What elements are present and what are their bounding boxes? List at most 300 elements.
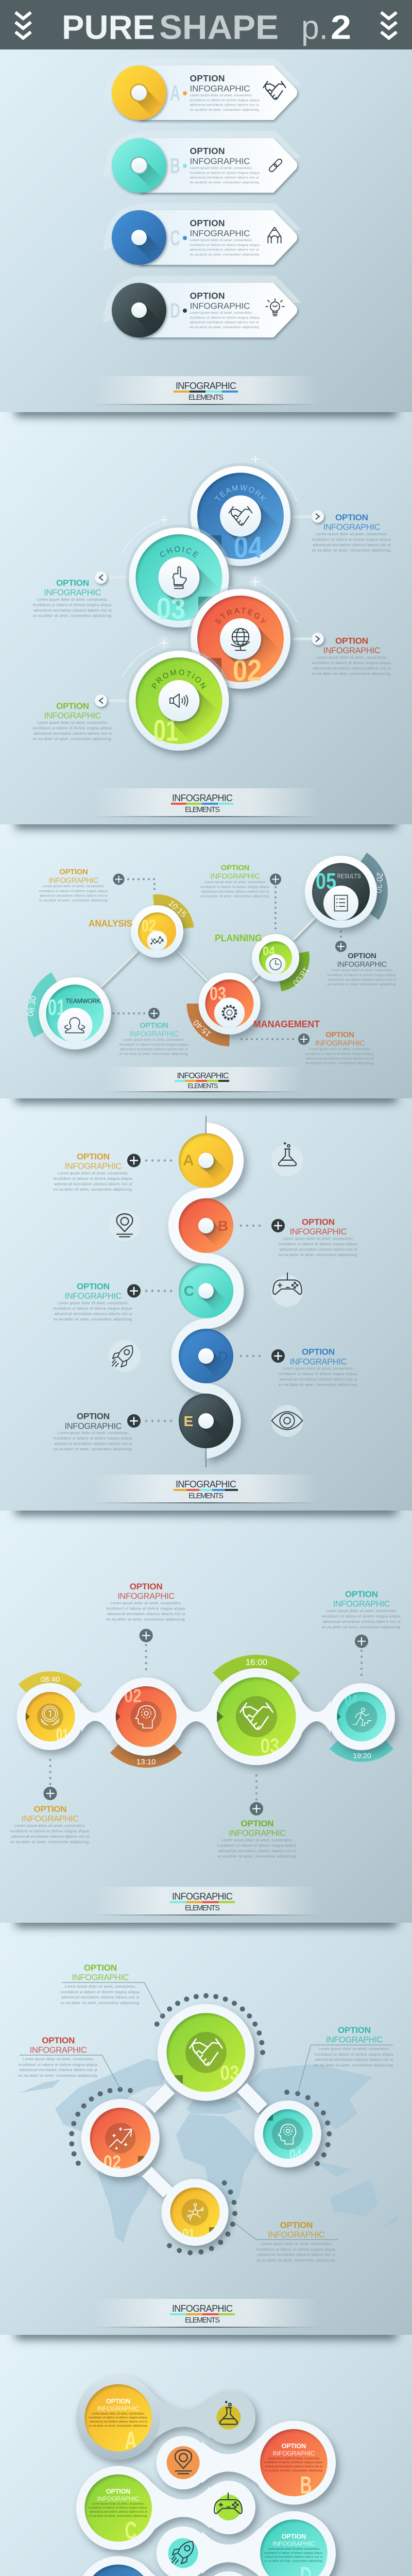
- time bands: [22, 1662, 389, 1761]
- disc E: [179, 1394, 233, 1448]
- text block A: adnostrud xercitation ullamco laboris nisi ut: [55, 1183, 132, 1186]
- text block 01: ex ea.dolor sit amet, consectetur adipisicing.: [10, 1840, 90, 1844]
- tag D: OPTION: [190, 291, 225, 301]
- text block green: ex ea.dolor sit amet, consectetur adipisicing.: [61, 2002, 140, 2005]
- capsule C: OPTION: [106, 2488, 130, 2495]
- text block: promotion option: adnostrud xercitation ullamco laboris nisi ut: [34, 732, 112, 736]
- text block E: INFOGRAPHIC: [65, 1421, 122, 1431]
- text block teal: ex ea.dolor sit amet, consectetur adipisicing.: [315, 2064, 394, 2067]
- text block: management option: adnostrud xercitation ullamco laboris nisi ut: [306, 1057, 374, 1061]
- band times: [41, 1657, 371, 1766]
- tag D: ex ea.dolor sit amet, consectetur adipisicing.: [190, 326, 260, 329]
- ring 02 strategy: STRATEGY: [215, 608, 267, 624]
- circle 04 teal: 04: [289, 2146, 302, 2162]
- capsule A: ex ea.dolor sit amet, consectetur adipisicing.: [89, 2425, 148, 2428]
- text block yellow: Lorem ipsum dolor sit amet, consectetur,: [261, 2242, 332, 2246]
- text block: planning option: adnostrud xercitation ullamco laboris nisi ut: [201, 890, 269, 894]
- text block 01: incididunt ut labore et dolore magna aliqua.: [10, 1830, 90, 1833]
- header title: 2: [331, 8, 351, 46]
- text block: results option: incididunt ut labore et dolore magna aliqua.: [328, 973, 397, 977]
- text block B: Lorem ipsum dolor sit amet, consectetur,: [283, 1238, 354, 1241]
- tag B: adnostrud xercitation ullamco laboris nisi ut: [190, 176, 259, 179]
- text block: choice option: incididunt ut labore et dolore magna aliqua.: [33, 604, 113, 607]
- dotted leaders and plus markers: [113, 874, 347, 1045]
- footer label: [93, 2299, 319, 2328]
- text block A: INFOGRAPHIC: [65, 1162, 122, 1171]
- tag C: C: [170, 226, 180, 250]
- text block green: OPTION: [84, 1963, 117, 1973]
- text block yellow: ex ea.dolor sit amet, consectetur adipisicing.: [256, 2259, 336, 2263]
- capsule A: OPTION: [106, 2398, 130, 2405]
- text block: teamwork option: ex ea.dolor sit amet, consectetur adipisicing.: [312, 549, 391, 552]
- top shadow: [15, 818, 397, 828]
- text block 01: OPTION: [34, 1804, 67, 1814]
- capsule D: Lorem ipsum dolor sit amet, consectetur,: [267, 2548, 320, 2551]
- text block green: adnostrud xercitation ullamco laboris nisi ut: [62, 1996, 140, 1999]
- dotted leaders: [146, 1160, 266, 1421]
- capsule C: C: [125, 2517, 137, 2545]
- top shadow: [15, 2329, 397, 2339]
- footer label: ELEMENTS: [187, 1082, 218, 1090]
- text block: results option: adnostrud xercitation ullamco laboris nisi ut: [328, 978, 396, 982]
- top shadow: [15, 1092, 397, 1103]
- capsule C: Lorem ipsum dolor sit amet, consectetur,: [92, 2502, 145, 2505]
- text block: teamwork option: OPTION: [335, 513, 368, 522]
- node 02 analysis: [131, 899, 188, 958]
- world map: [20, 2059, 400, 2243]
- text block: management option: INFOGRAPHIC: [315, 1039, 365, 1047]
- tag B: incididunt ut labore et dolore magna aliqua.: [190, 171, 261, 175]
- text block: analysis option: adnostrud xercitation ullamco laboris nisi ut: [40, 894, 108, 898]
- capsule B: [157, 2420, 336, 2505]
- tag B: INFOGRAPHIC: [190, 157, 250, 166]
- node 05 results: [305, 856, 384, 928]
- disc A: A: [183, 1152, 194, 1169]
- tag D: D: [170, 298, 180, 323]
- tag D: Lorem ipsum dolor sit amet, consectetur,: [190, 311, 253, 315]
- tag D: incididunt ut labore et dolore magna aliqua.: [190, 316, 261, 319]
- capsule B: ex ea.dolor sit amet, consectetur adipisicing.: [264, 2469, 323, 2472]
- text block teal: [314, 2025, 394, 2067]
- circle 01 yellow: [170, 2188, 220, 2241]
- disc E: E: [184, 1413, 193, 1429]
- circle 03 green: 03: [220, 2062, 239, 2084]
- text block B: INFOGRAPHIC: [289, 1227, 347, 1236]
- knob chevrons: [99, 514, 319, 704]
- footer label: ELEMENTS: [188, 1492, 224, 1500]
- band times: 13:10: [136, 1758, 156, 1766]
- panel 3: timeline network: [0, 818, 412, 1098]
- ring 04 teamwork: 04: [234, 531, 263, 564]
- text block: teamwork option: adnostrud xercitation ullamco laboris nisi ut: [313, 544, 391, 547]
- icon: right chevrons: [381, 12, 397, 38]
- text block 01: Lorem ipsum dolor sit amet, consectetur,: [14, 1824, 86, 1828]
- circle 04: 04: [345, 1692, 358, 1709]
- footer label: [93, 1475, 319, 1503]
- text block: strategy option: OPTION: [335, 636, 368, 646]
- panel background: [0, 1511, 412, 1923]
- capsule C: incididunt ut labore et dolore magna aliqua.: [89, 2506, 148, 2510]
- text block yellow: OPTION: [280, 2221, 313, 2230]
- text block A: OPTION: [77, 1152, 110, 1161]
- panel background: [0, 412, 412, 824]
- tag A: INFOGRAPHIC: [190, 83, 250, 94]
- text block: choice option: INFOGRAPHIC: [44, 588, 101, 598]
- capsule E: [76, 2556, 255, 2576]
- disc C: C: [184, 1283, 194, 1299]
- header title: p.: [301, 8, 328, 46]
- text block D: adnostrud xercitation ullamco laboris nisi ut: [279, 1378, 357, 1382]
- circle 04: [337, 1692, 386, 1741]
- disc B: B: [218, 1218, 228, 1234]
- text block: promotion option: [33, 701, 113, 741]
- ring 04 teamwork: [187, 463, 298, 575]
- text block: teamwork option: INFOGRAPHIC: [129, 1030, 179, 1038]
- text block green: incididunt ut labore et dolore magna aliqua.: [61, 1991, 141, 1994]
- capsule B: Lorem ipsum dolor sit amet, consectetur,: [267, 2457, 320, 2460]
- text block: teamwork option: [119, 1022, 189, 1056]
- stage labels: MANAGEMENT: [253, 1019, 320, 1029]
- text block: analysis option: Lorem ipsum dolor sit amet, consectetur,: [43, 885, 105, 888]
- node 02 analysis: 02: [142, 917, 156, 935]
- tag C: Lorem ipsum dolor sit amet, consectetur,: [190, 239, 253, 242]
- tag A: A: [170, 81, 180, 105]
- text block green: [61, 1963, 141, 2005]
- disc B: [179, 1198, 233, 1253]
- tag D: [103, 276, 301, 337]
- text block: strategy option: ex ea.dolor sit amet, consectetur adipisicing.: [312, 672, 391, 676]
- tag A: incididunt ut labore et dolore magna aliqua.: [190, 99, 261, 102]
- disc A: [179, 1133, 233, 1188]
- text block: strategy option: INFOGRAPHIC: [323, 646, 381, 655]
- text block: promotion option: incididunt ut labore et dolore magna aliqua.: [33, 726, 113, 731]
- icon badges: [109, 1143, 303, 1437]
- text block red: [19, 2036, 98, 2078]
- footer label: [105, 1067, 302, 1092]
- text block yellow: [256, 2221, 336, 2263]
- node 04 planning: [252, 934, 311, 987]
- text block 02: INFOGRAPHIC: [117, 1592, 175, 1601]
- capsule A: [76, 2376, 255, 2460]
- header bar: [0, 0, 412, 49]
- node 05 results: RESULTS: [337, 873, 361, 880]
- capsule D: ex ea.dolor sit amet, consectetur adipisicing.: [264, 2560, 323, 2563]
- ring 03 choice: CHOICE: [160, 546, 199, 558]
- ring 02 strategy: 02: [233, 654, 262, 687]
- text block: teamwork option: ex ea.dolor sit amet, consectetur adipisicing.: [119, 1053, 188, 1056]
- arrow knobs: [95, 510, 324, 707]
- footer label: [93, 376, 319, 405]
- disc C: [179, 1264, 233, 1318]
- text block 04: OPTION: [345, 1589, 378, 1599]
- capsule C: [76, 2466, 255, 2550]
- text block: results option: Lorem ipsum dolor sit amet, consectetur,: [331, 969, 393, 972]
- text block 01: INFOGRAPHIC: [22, 1815, 79, 1824]
- text block teal: incididunt ut labore et dolore magna aliqua.: [314, 2053, 394, 2057]
- stage labels: PLANNING: [215, 933, 262, 943]
- panel background: [0, 2335, 412, 2576]
- circle 02: 02: [124, 1685, 142, 1706]
- text block D: OPTION: [302, 1347, 335, 1357]
- footer label: INFOGRAPHIC: [172, 2303, 233, 2314]
- text block teal: Lorem ipsum dolor sit amet, consectetur,: [319, 2047, 390, 2051]
- tag B: ex ea.dolor sit amet, consectetur adipisicing.: [190, 181, 260, 184]
- text block 01: [10, 1804, 90, 1844]
- node 01 teamwork: 01: [48, 995, 65, 1020]
- text block D: incididunt ut labore et dolore magna aliqua.: [278, 1372, 358, 1376]
- disc D: D: [218, 1348, 228, 1364]
- text block: management option: OPTION: [325, 1031, 354, 1039]
- footer label: INFOGRAPHIC: [177, 1072, 229, 1080]
- connected white rings: [81, 2004, 321, 2246]
- text block C: INFOGRAPHIC: [65, 1292, 122, 1301]
- ring 02 strategy: [187, 586, 298, 697]
- text block 03: incididunt ut labore et dolore magna aliqua.: [217, 1844, 297, 1848]
- tag A: ex ea.dolor sit amet, consectetur adipisicing.: [190, 108, 260, 112]
- text block: teamwork option: adnostrud xercitation ullamco laboris nisi ut: [120, 1047, 188, 1052]
- node 04 planning: 04: [263, 944, 276, 958]
- node 01 teamwork: TEAMWORK: [66, 997, 101, 1005]
- tag C: INFOGRAPHIC: [190, 229, 250, 238]
- text block: analysis option: OPTION: [59, 868, 88, 876]
- ring 01 promotion: [126, 648, 236, 759]
- panel 4: serpentine vertical timeline: [0, 1092, 412, 1511]
- text block E: adnostrud xercitation ullamco laboris nisi ut: [55, 1443, 132, 1446]
- text block: planning option: INFOGRAPHIC: [210, 872, 260, 880]
- ring 01 promotion: PROMOTION: [151, 670, 207, 689]
- text block green: Lorem ipsum dolor sit amet, consectetur,: [65, 1985, 136, 1989]
- text block B: incididunt ut labore et dolore magna aliqua.: [278, 1243, 358, 1246]
- tag D: adnostrud xercitation ullamco laboris nisi ut: [190, 320, 259, 325]
- text block A: incididunt ut labore et dolore magna aliqua.: [54, 1177, 133, 1181]
- circle 03 green: [167, 2013, 245, 2092]
- tag A: Lorem ipsum dolor sit amet, consectetur,: [190, 94, 253, 97]
- node 01 teamwork: 08:30: [26, 995, 38, 1017]
- text block D: INFOGRAPHIC: [289, 1357, 347, 1366]
- connector links: [101, 918, 315, 987]
- top shadow: [15, 1504, 397, 1515]
- text block: teamwork option: incididunt ut labore et dolore magna aliqua.: [119, 1043, 189, 1046]
- band times: 19:20: [353, 1752, 371, 1760]
- linked white rings: [16, 1668, 395, 1765]
- header title: PURE: [62, 8, 155, 46]
- text block C: Lorem ipsum dolor sit amet, consectetur,: [58, 1301, 129, 1306]
- plus markers: [127, 1154, 285, 1428]
- text block red: adnostrud xercitation ullamco laboris nisi ut: [20, 2069, 97, 2072]
- text block 04: ex ea.dolor sit amet, consectetur adipisicing.: [322, 1626, 401, 1629]
- text block 03: INFOGRAPHIC: [229, 1829, 286, 1838]
- text block yellow: INFOGRAPHIC: [268, 2230, 325, 2240]
- circle 04 teal: [263, 2109, 313, 2162]
- text block green: INFOGRAPHIC: [72, 1973, 129, 1982]
- capsule D: [157, 2511, 336, 2576]
- ring 01 promotion: 01: [153, 714, 178, 748]
- panel 5: horizontal linked circles: [0, 1504, 412, 1923]
- text block teal: OPTION: [338, 2025, 371, 2035]
- text block C: OPTION: [77, 1282, 110, 1291]
- tag C: adnostrud xercitation ullamco laboris nisi ut: [190, 248, 259, 251]
- text block: management option: ex ea.dolor sit amet, consectetur adipisicing.: [305, 1062, 374, 1065]
- serpentine ribbon: [174, 1128, 238, 1453]
- icon: left chevrons: [15, 12, 31, 38]
- capsule D: incididunt ut labore et dolore magna aliqua.: [264, 2552, 323, 2555]
- node 03 management: 15:40: [192, 1018, 213, 1038]
- text block A: Lorem ipsum dolor sit amet, consectetur,: [58, 1172, 129, 1176]
- text block: management option: incididunt ut labore et dolore magna aliqua.: [305, 1052, 375, 1056]
- text block: choice option: Lorem ipsum dolor sit amet, consectetur,: [37, 598, 108, 602]
- text block 03: [217, 1819, 297, 1859]
- text block 02: ex ea.dolor sit amet, consectetur adipisicing.: [107, 1618, 186, 1622]
- text block: choice option: ex ea.dolor sit amet, consectetur adipisicing.: [33, 614, 112, 618]
- text block 02: adnostrud xercitation ullamco laboris nisi ut: [107, 1613, 185, 1616]
- panel background: [0, 1098, 412, 1511]
- node 01 teamwork: [26, 977, 111, 1049]
- text block: promotion option: Lorem ipsum dolor sit amet, consectetur,: [37, 721, 108, 725]
- ring 03 choice: [126, 524, 237, 636]
- node 03 management: 03: [210, 983, 226, 1004]
- top shadow: [15, 1917, 397, 1927]
- text block: analysis option: [39, 868, 109, 903]
- capsule B: incididunt ut labore et dolore magna aliqua.: [264, 2461, 323, 2464]
- dotted arcs: [72, 1996, 329, 2253]
- text block B: [278, 1217, 358, 1257]
- text block: teamwork option: OPTION: [140, 1022, 168, 1030]
- panel background: [0, 0, 412, 412]
- text block: planning option: Lorem ipsum dolor sit amet, consectetur,: [204, 880, 266, 884]
- footer label: INFOGRAPHIC: [172, 793, 233, 803]
- capsule B: INFOGRAPHIC: [272, 2450, 315, 2457]
- text block: teamwork option: INFOGRAPHIC: [323, 523, 381, 532]
- panel 2: four overlapping rings: [0, 412, 412, 824]
- circle 03: [217, 1677, 296, 1757]
- disc D: [179, 1329, 233, 1383]
- text block 02: Lorem ipsum dolor sit amet, consectetur,: [111, 1602, 182, 1605]
- circle 01 yellow: 01: [182, 2226, 195, 2241]
- top shadow: [15, 406, 397, 416]
- text block E: Lorem ipsum dolor sit amet, consectetur,: [58, 1432, 129, 1435]
- text block: planning option: OPTION: [221, 864, 249, 872]
- capsule D: INFOGRAPHIC: [272, 2540, 315, 2547]
- text block E: OPTION: [77, 1412, 110, 1421]
- text block: results option: [328, 952, 397, 987]
- text block 04: adnostrud xercitation ullamco laboris nisi ut: [322, 1620, 401, 1624]
- text block E: [54, 1412, 133, 1451]
- header title: SHAPE: [159, 8, 279, 46]
- text block: results option: OPTION: [348, 952, 376, 960]
- text block 04: Lorem ipsum dolor sit amet, consectetur,: [326, 1609, 397, 1613]
- text block B: ex ea.dolor sit amet, consectetur adipisicing.: [279, 1253, 358, 1257]
- text block 03: adnostrud xercitation ullamco laboris nisi ut: [218, 1850, 296, 1853]
- text block: strategy option: [312, 636, 392, 676]
- text block B: adnostrud xercitation ullamco laboris nisi ut: [279, 1248, 357, 1252]
- text block: strategy option: adnostrud xercitation ullamco laboris nisi ut: [313, 667, 391, 671]
- footer label: [93, 788, 319, 817]
- capsule B: B: [300, 2472, 312, 2499]
- footer label: ELEMENTS: [185, 806, 220, 814]
- tag A: OPTION: [190, 73, 225, 83]
- node 02 analysis: 10:15: [166, 899, 188, 919]
- plus markers: [43, 1629, 368, 1816]
- tag C: OPTION: [190, 218, 225, 228]
- text block 03: Lorem ipsum dolor sit amet, consectetur,: [221, 1839, 293, 1842]
- capsule C: ex ea.dolor sit amet, consectetur adipisicing.: [89, 2515, 148, 2518]
- header title: [62, 8, 351, 46]
- circle 02 red: [90, 2108, 151, 2173]
- capsule D: OPTION: [282, 2533, 306, 2540]
- capsule A: Lorem ipsum dolor sit amet, consectetur,: [92, 2412, 145, 2415]
- text block B: OPTION: [302, 1217, 335, 1227]
- text block: promotion option: INFOGRAPHIC: [44, 711, 101, 721]
- text block: analysis option: ex ea.dolor sit amet, consectetur adipisicing.: [39, 899, 108, 903]
- text block E: ex ea.dolor sit amet, consectetur adipisicing.: [54, 1448, 133, 1451]
- text block red: incididunt ut labore et dolore magna aliqua.: [19, 2063, 98, 2067]
- panel 7: interlocking capsules: [0, 2329, 412, 2576]
- tag A: adnostrud xercitation ullamco laboris nisi ut: [190, 103, 259, 107]
- tag B: [103, 131, 301, 193]
- panel 1: horizontal arrow tags: [0, 0, 412, 412]
- text block 04: INFOGRAPHIC: [333, 1600, 390, 1609]
- tag B: B: [170, 154, 180, 178]
- text block: results option: ex ea.dolor sit amet, consectetur adipisicing.: [328, 983, 397, 987]
- text block D: ex ea.dolor sit amet, consectetur adipisicing.: [279, 1383, 358, 1387]
- text block: strategy option: Lorem ipsum dolor sit amet, consectetur,: [316, 656, 387, 659]
- text block: planning option: incididunt ut labore et dolore magna aliqua.: [200, 885, 270, 889]
- ring 04 teamwork: TEAMWORK: [214, 484, 266, 502]
- text block: promotion option: OPTION: [56, 701, 89, 711]
- footer label: INFOGRAPHIC: [172, 1891, 233, 1902]
- footer label: ELEMENTS: [185, 2316, 220, 2325]
- text block: management option: [305, 1031, 375, 1065]
- circle 01: 01: [56, 1725, 68, 1744]
- text block A: ex ea.dolor sit amet, consectetur adipisicing.: [54, 1188, 133, 1192]
- circle 03: 03: [261, 1735, 279, 1757]
- dotted leaders: [50, 1645, 362, 1800]
- circle 02 red: 02: [104, 2151, 121, 2173]
- text block: strategy option: incididunt ut labore et dolore magna aliqua.: [312, 662, 392, 665]
- text block: planning option: [200, 864, 270, 899]
- text block 01: adnostrud xercitation ullamco laboris nisi ut: [11, 1835, 89, 1839]
- callout lines: [20, 1982, 393, 2240]
- capsule C: INFOGRAPHIC: [97, 2495, 140, 2502]
- band times: 08:40: [41, 1675, 60, 1684]
- footer label: [93, 1887, 319, 1916]
- node 04 planning: 18:00: [290, 965, 311, 987]
- capsule A: incididunt ut labore et dolore magna aliqua.: [89, 2416, 148, 2419]
- text block E: incididunt ut labore et dolore magna aliqua.: [54, 1437, 133, 1440]
- node 05 results: 20:30: [373, 872, 384, 893]
- markers and connectors: [108, 453, 313, 701]
- tag C: ex ea.dolor sit amet, consectetur adipisicing.: [190, 253, 260, 257]
- capsule C: adnostrud xercitation ullamco laboris nisi ut: [90, 2511, 147, 2514]
- ribbon end seams: [205, 1116, 207, 1467]
- text block teal: adnostrud xercitation ullamco laboris nisi ut: [315, 2058, 393, 2062]
- text block: analysis option: incididunt ut labore et dolore magna aliqua.: [39, 889, 109, 893]
- capsule D: adnostrud xercitation ullamco laboris nisi ut: [265, 2556, 323, 2559]
- text block: results option: INFOGRAPHIC: [337, 960, 387, 969]
- text block C: incididunt ut labore et dolore magna aliqua.: [54, 1307, 133, 1311]
- text block: analysis option: INFOGRAPHIC: [49, 876, 98, 885]
- ring 03 choice: 03: [157, 592, 185, 625]
- capsule A: adnostrud xercitation ullamco laboris nisi ut: [90, 2420, 147, 2424]
- text block D: [278, 1347, 358, 1387]
- tag B: OPTION: [190, 146, 225, 156]
- text block 02: OPTION: [130, 1582, 163, 1591]
- footer label: ELEMENTS: [185, 1904, 220, 1912]
- text block 04: incididunt ut labore et dolore magna aliqua.: [321, 1615, 402, 1619]
- circle 02: [116, 1685, 177, 1747]
- text block: teamwork option: incididunt ut labore et dolore magna aliqua.: [312, 538, 392, 542]
- capsule B: adnostrud xercitation ullamco laboris nisi ut: [265, 2465, 323, 2468]
